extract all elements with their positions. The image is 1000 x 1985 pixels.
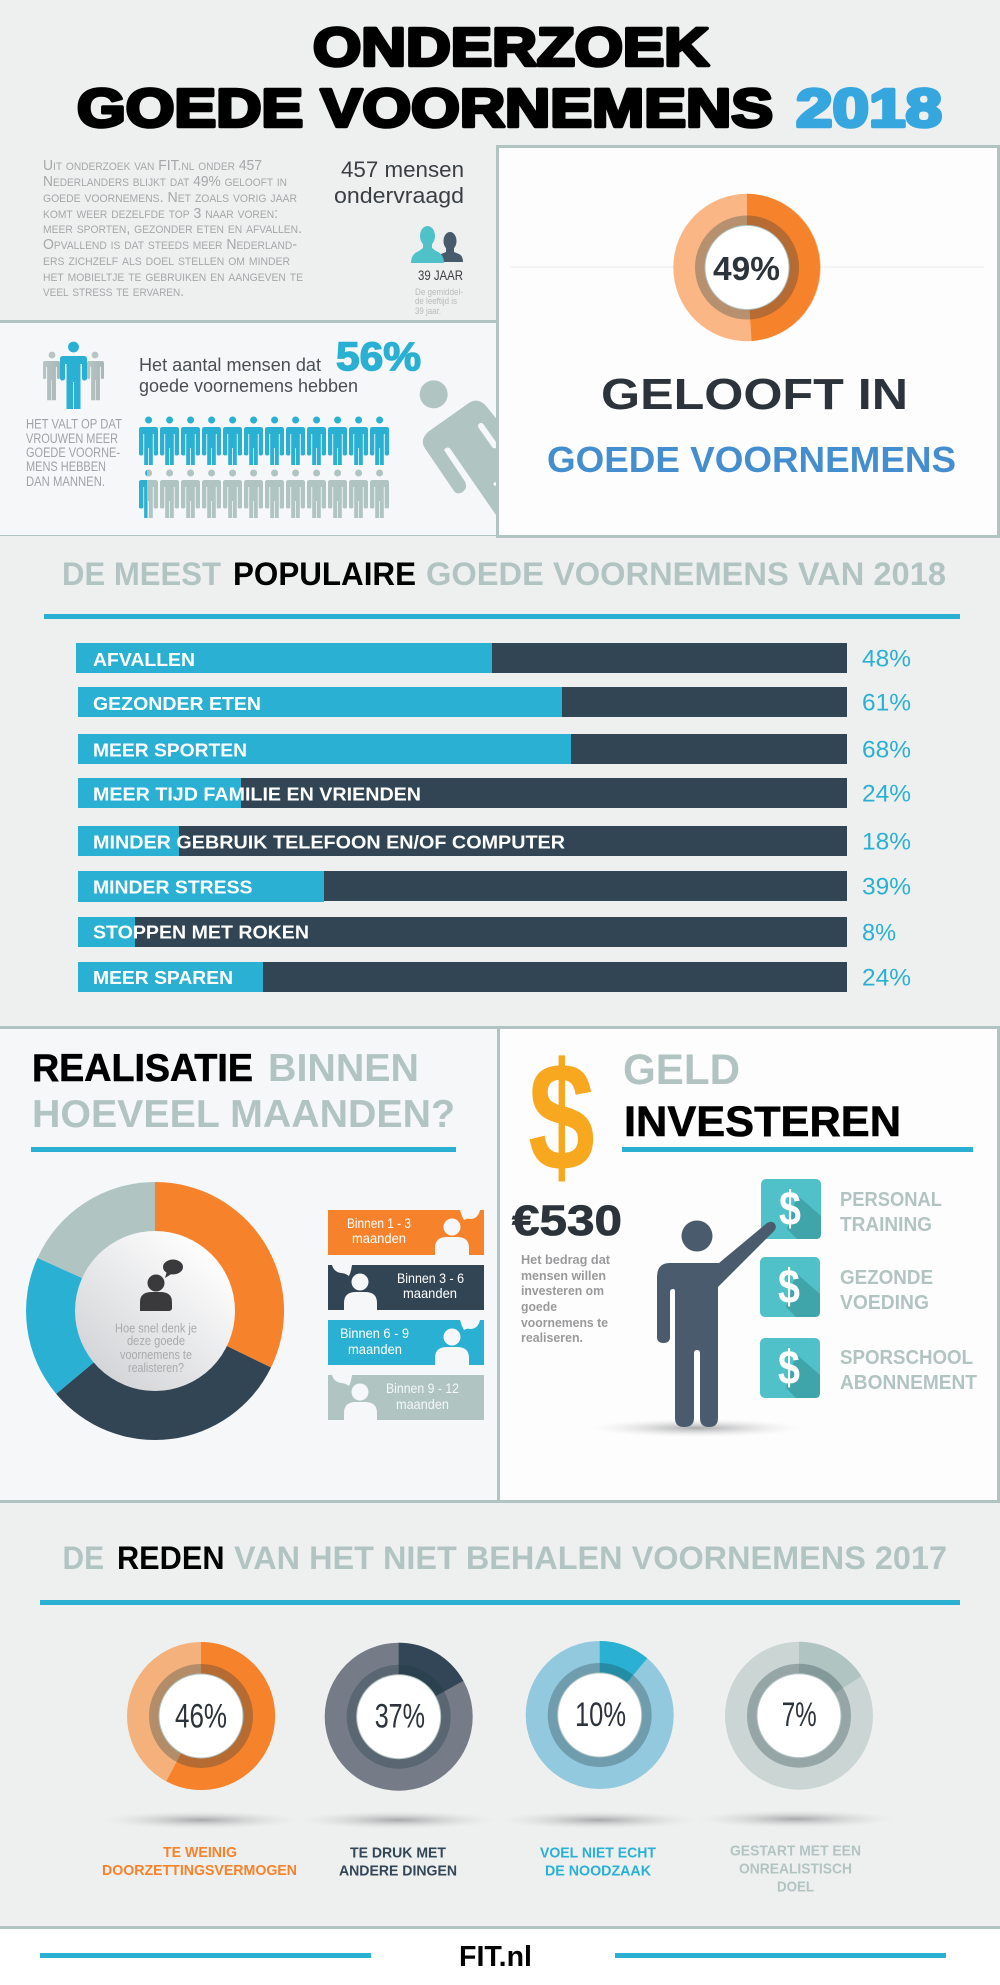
- text: women note: VROUWEN MEER: [26, 431, 118, 446]
- text: investment items: ABONNEMENT: [840, 1372, 977, 1394]
- bar: afvallen: 48%: [862, 646, 911, 672]
- donut: 10 percent: 10%: [575, 1696, 626, 1734]
- donut centre text: deze goede: [127, 1334, 185, 1348]
- icon: tilted person: [420, 380, 496, 515]
- text: amount description: investeren om: [521, 1283, 604, 1298]
- donut: 7 percent: [725, 1642, 873, 1790]
- intro text: Uit onderzoek van FIT.nl onder 457: [43, 157, 262, 174]
- label: te weinig doorzettingsvermogen: [102, 1844, 297, 1879]
- legend: 1-3 months: Binnen 1 - 3: [347, 1215, 411, 1231]
- bar: stoppen met roken: [78, 917, 896, 947]
- text: amount description: goede: [521, 1299, 557, 1314]
- label: te druk met andere dingen: [339, 1844, 457, 1880]
- text: women note: HET VALT OP DAT: [26, 416, 122, 432]
- legend: 3-6 months: [328, 1265, 484, 1310]
- text: women note: DAN MANNEN.: [26, 474, 105, 489]
- text: amount description: [521, 1252, 611, 1345]
- heading: REALISATIE: [32, 1047, 253, 1090]
- bar chart: [76, 643, 911, 992]
- label: voel niet echt de noodzaak: DE NOODZAAK: [545, 1862, 651, 1880]
- panel: 56 percent: [0, 320, 497, 536]
- bar: meer sporten: MEER SPORTEN: [93, 740, 247, 760]
- text: women note: GOEDE VOORNE-: [26, 445, 120, 460]
- donut: 10 percent: [526, 1641, 674, 1789]
- bar: minder stress: 39%: [862, 874, 911, 900]
- legend: 3-6 months: maanden: [403, 1285, 457, 1301]
- legend: 6-9 months: maanden: [348, 1341, 402, 1357]
- donut centre text: Hoe snel denk je: [115, 1322, 197, 1336]
- icon: dollar tile 1: $: [779, 1182, 801, 1236]
- label: gestart met een onrealistisch doel: [730, 1842, 861, 1896]
- text: women note: MENS HEBBEN: [26, 459, 106, 474]
- title: 2018: [796, 78, 942, 138]
- text: people with resolutions: Het aantal mensen dat: [139, 355, 321, 375]
- label: te weinig doorzettingsvermogen: DOORZETTINGSVERMOGEN: [102, 1862, 297, 1879]
- legend: 9-12 months: [328, 1375, 484, 1420]
- heading: POPULAIRE: [233, 556, 416, 592]
- bar: minder stress: MINDER STRESS: [93, 878, 252, 898]
- intro text: goede voornemens. Net zoals vorig jaar: [43, 189, 297, 206]
- average age note: [415, 287, 463, 317]
- icon: three people: [43, 342, 104, 409]
- legend: 9-12 months: maanden: [396, 1396, 449, 1412]
- legend: 3-6 months: Binnen 3 - 6: [397, 1270, 464, 1286]
- intro text: Opvallend is dat steeds meer Nederland-: [43, 236, 297, 253]
- heading: goede voornemens: GOEDE VOORNEMENS: [547, 439, 956, 480]
- icon: dollar tile 2: $: [778, 1260, 800, 1314]
- bar: stoppen met roken: 8%: [862, 920, 896, 946]
- stat: amount: €530: [512, 1197, 622, 1245]
- bar: meer sparen: 24%: [862, 964, 911, 992]
- icon: speaking person: [140, 1260, 183, 1311]
- label: te weinig doorzettingsvermogen: TE WEINIG: [163, 1844, 237, 1861]
- donut: 46 percent: [127, 1642, 275, 1790]
- panel: 49 percent: [498, 146, 998, 536]
- bar: gezonder eten: [78, 687, 911, 717]
- heading: [32, 1047, 455, 1136]
- icon: dollar tile 3: [760, 1338, 820, 1398]
- bar: meer sporten: 68%: [862, 736, 911, 764]
- panel: intro: [43, 157, 464, 317]
- bar: minder gebruik telefoon: [78, 826, 911, 856]
- logo: FIT.nl: [459, 1941, 532, 1973]
- label: te druk met andere dingen: TE DRUK MET: [350, 1844, 446, 1862]
- label: gestart met een onrealistisch doel: GESTART MET EEN: [730, 1842, 861, 1860]
- bar: meer tijd familie en vrienden: 24%: [862, 780, 911, 808]
- respondent count: [334, 157, 464, 208]
- donut: 37 percent: [325, 1643, 473, 1791]
- legend: 6-9 months: [328, 1320, 484, 1365]
- text: people with resolutions: goede voornemens hebben: [139, 376, 358, 396]
- bar: meer tijd familie en vrienden: [78, 778, 911, 808]
- intro text: komt weer dezelfde top 3 naar voren:: [43, 205, 278, 222]
- donut centre text: realisteren?: [128, 1361, 184, 1375]
- heading: INVESTEREN: [624, 1098, 901, 1146]
- icon: dollar sign: $: [528, 1032, 595, 1204]
- intro text: [43, 157, 303, 300]
- heading: gelooft in: GELOOFT IN: [601, 370, 908, 419]
- intro text: Nederlanders blijkt dat 49% gelooft in: [43, 173, 287, 190]
- average age label: 39 JAAR: [418, 267, 463, 283]
- heading: [623, 1046, 901, 1146]
- text: amount description: mensen willen: [521, 1268, 606, 1283]
- legend: 1-3 months: [328, 1210, 484, 1255]
- bar: gezonder eten: 61%: [862, 690, 911, 716]
- icon: two people: [411, 226, 463, 263]
- donut centre text: voornemens te: [120, 1348, 192, 1362]
- bar: meer sporten: [78, 734, 911, 764]
- bar: meer tijd familie en vrienden: MEER TIJD FAMILIE EN VRIENDEN: [93, 784, 421, 804]
- title: [77, 18, 942, 138]
- label: gestart met een onrealistisch doel: ONREALISTISCH: [739, 1860, 852, 1878]
- intro text: veel stress te ervaren.: [43, 283, 184, 300]
- text: investment items: [840, 1189, 977, 1394]
- text: investment items: GEZONDE: [840, 1267, 933, 1289]
- icon: dollar tile 2: [760, 1257, 820, 1317]
- icon: dollar tile 3: $: [778, 1341, 800, 1395]
- bar: stoppen met roken: STOPPEN MET ROKEN: [93, 922, 309, 942]
- bar: meer sparen: MEER SPAREN: [93, 968, 233, 988]
- text: amount description: realiseren.: [521, 1330, 583, 1345]
- footer: [0, 1926, 1000, 1985]
- respondent count: ondervraagd: [334, 183, 464, 208]
- donut chart: [26, 1182, 284, 1440]
- intro text: het mobieltje te gebruiken en aangeven te: [43, 268, 303, 285]
- heading: VAN HET NIET BEHALEN VOORNEMENS 2017: [234, 1540, 947, 1576]
- text: investment items: VOEDING: [840, 1292, 929, 1314]
- donut centre text: [115, 1322, 197, 1375]
- bar: meer sparen: [78, 962, 911, 992]
- average age note: De gemiddel-: [415, 287, 463, 298]
- heading: REDEN: [117, 1540, 224, 1576]
- stat: 56 percent: 56%: [336, 335, 421, 379]
- heading: DE: [62, 1540, 104, 1576]
- intro text: meer sporten, gezonder eten en afvallen.: [43, 220, 302, 237]
- icon: pointing person: [657, 1220, 776, 1427]
- bar: gezonder eten: GEZONDER ETEN: [93, 694, 261, 714]
- label: voel niet echt de noodzaak: VOEL NIET ECHT: [540, 1844, 656, 1862]
- heading: [62, 556, 946, 592]
- bar: afvallen: [76, 643, 911, 673]
- title: GOEDE VOORNEMENS: [77, 78, 773, 138]
- icon: dollar tile 1: [761, 1179, 821, 1239]
- legend: [328, 1210, 484, 1420]
- donut: 37 percent: 37%: [375, 1698, 425, 1736]
- respondent count: 457 mensen: [341, 157, 464, 182]
- legend: 1-3 months: maanden: [352, 1230, 406, 1246]
- bar: minder gebruik telefoon: 18%: [862, 828, 911, 856]
- bar: afvallen: AFVALLEN: [93, 650, 195, 670]
- panel: geld investeren: [498, 1028, 998, 1502]
- average age note: de leeftijd is: [415, 296, 457, 307]
- heading: GOEDE VOORNEMENS VAN 2018: [426, 556, 946, 592]
- shadow under person: [592, 1419, 802, 1437]
- bar: minder stress: [78, 871, 911, 902]
- text: investment items: TRAINING: [840, 1214, 932, 1236]
- title: ONDERZOEK: [313, 18, 709, 78]
- donut: 7 percent: 7%: [782, 1696, 817, 1734]
- heading: HOEVEEL MAANDEN?: [32, 1093, 455, 1136]
- label: voel niet echt de noodzaak: [540, 1844, 656, 1880]
- label: te druk met andere dingen: ANDERE DINGEN: [339, 1862, 457, 1880]
- panel: realisatie: [0, 1026, 500, 1503]
- text: people with resolutions: [139, 355, 358, 396]
- intro text: ers zichzelf als doel stellen om minder: [43, 252, 290, 269]
- bar: minder gebruik telefoon: MINDER GEBRUIK TELEFOON EN/OF COMPUTER: [93, 832, 565, 852]
- heading: GELD: [623, 1046, 740, 1094]
- donut: 49 percent: [673, 194, 821, 341]
- legend: 6-9 months: Binnen 6 - 9: [340, 1325, 409, 1341]
- text: amount description: voornemens te: [521, 1315, 608, 1330]
- heading: DE MEEST: [62, 556, 221, 592]
- text: investment items: SPORSCHOOL: [840, 1347, 973, 1369]
- average age note: 39 jaar.: [415, 306, 441, 317]
- text: investment items: PERSONAL: [840, 1189, 942, 1211]
- label: gestart met een onrealistisch doel: DOEL: [777, 1878, 814, 1896]
- pictogram: people grid: [139, 416, 389, 518]
- text: amount description: Het bedrag dat: [521, 1252, 611, 1267]
- legend: 9-12 months: Binnen 9 - 12: [386, 1380, 459, 1396]
- donut: 46 percent: 46%: [175, 1698, 227, 1736]
- panel: reasons: [40, 1540, 960, 1896]
- heading: BINNEN: [268, 1047, 419, 1090]
- text: women note: [26, 416, 122, 489]
- donut: 49 percent: 49%: [713, 250, 780, 287]
- donut shadows: [101, 1810, 896, 1829]
- panel: popular resolutions: [44, 556, 960, 992]
